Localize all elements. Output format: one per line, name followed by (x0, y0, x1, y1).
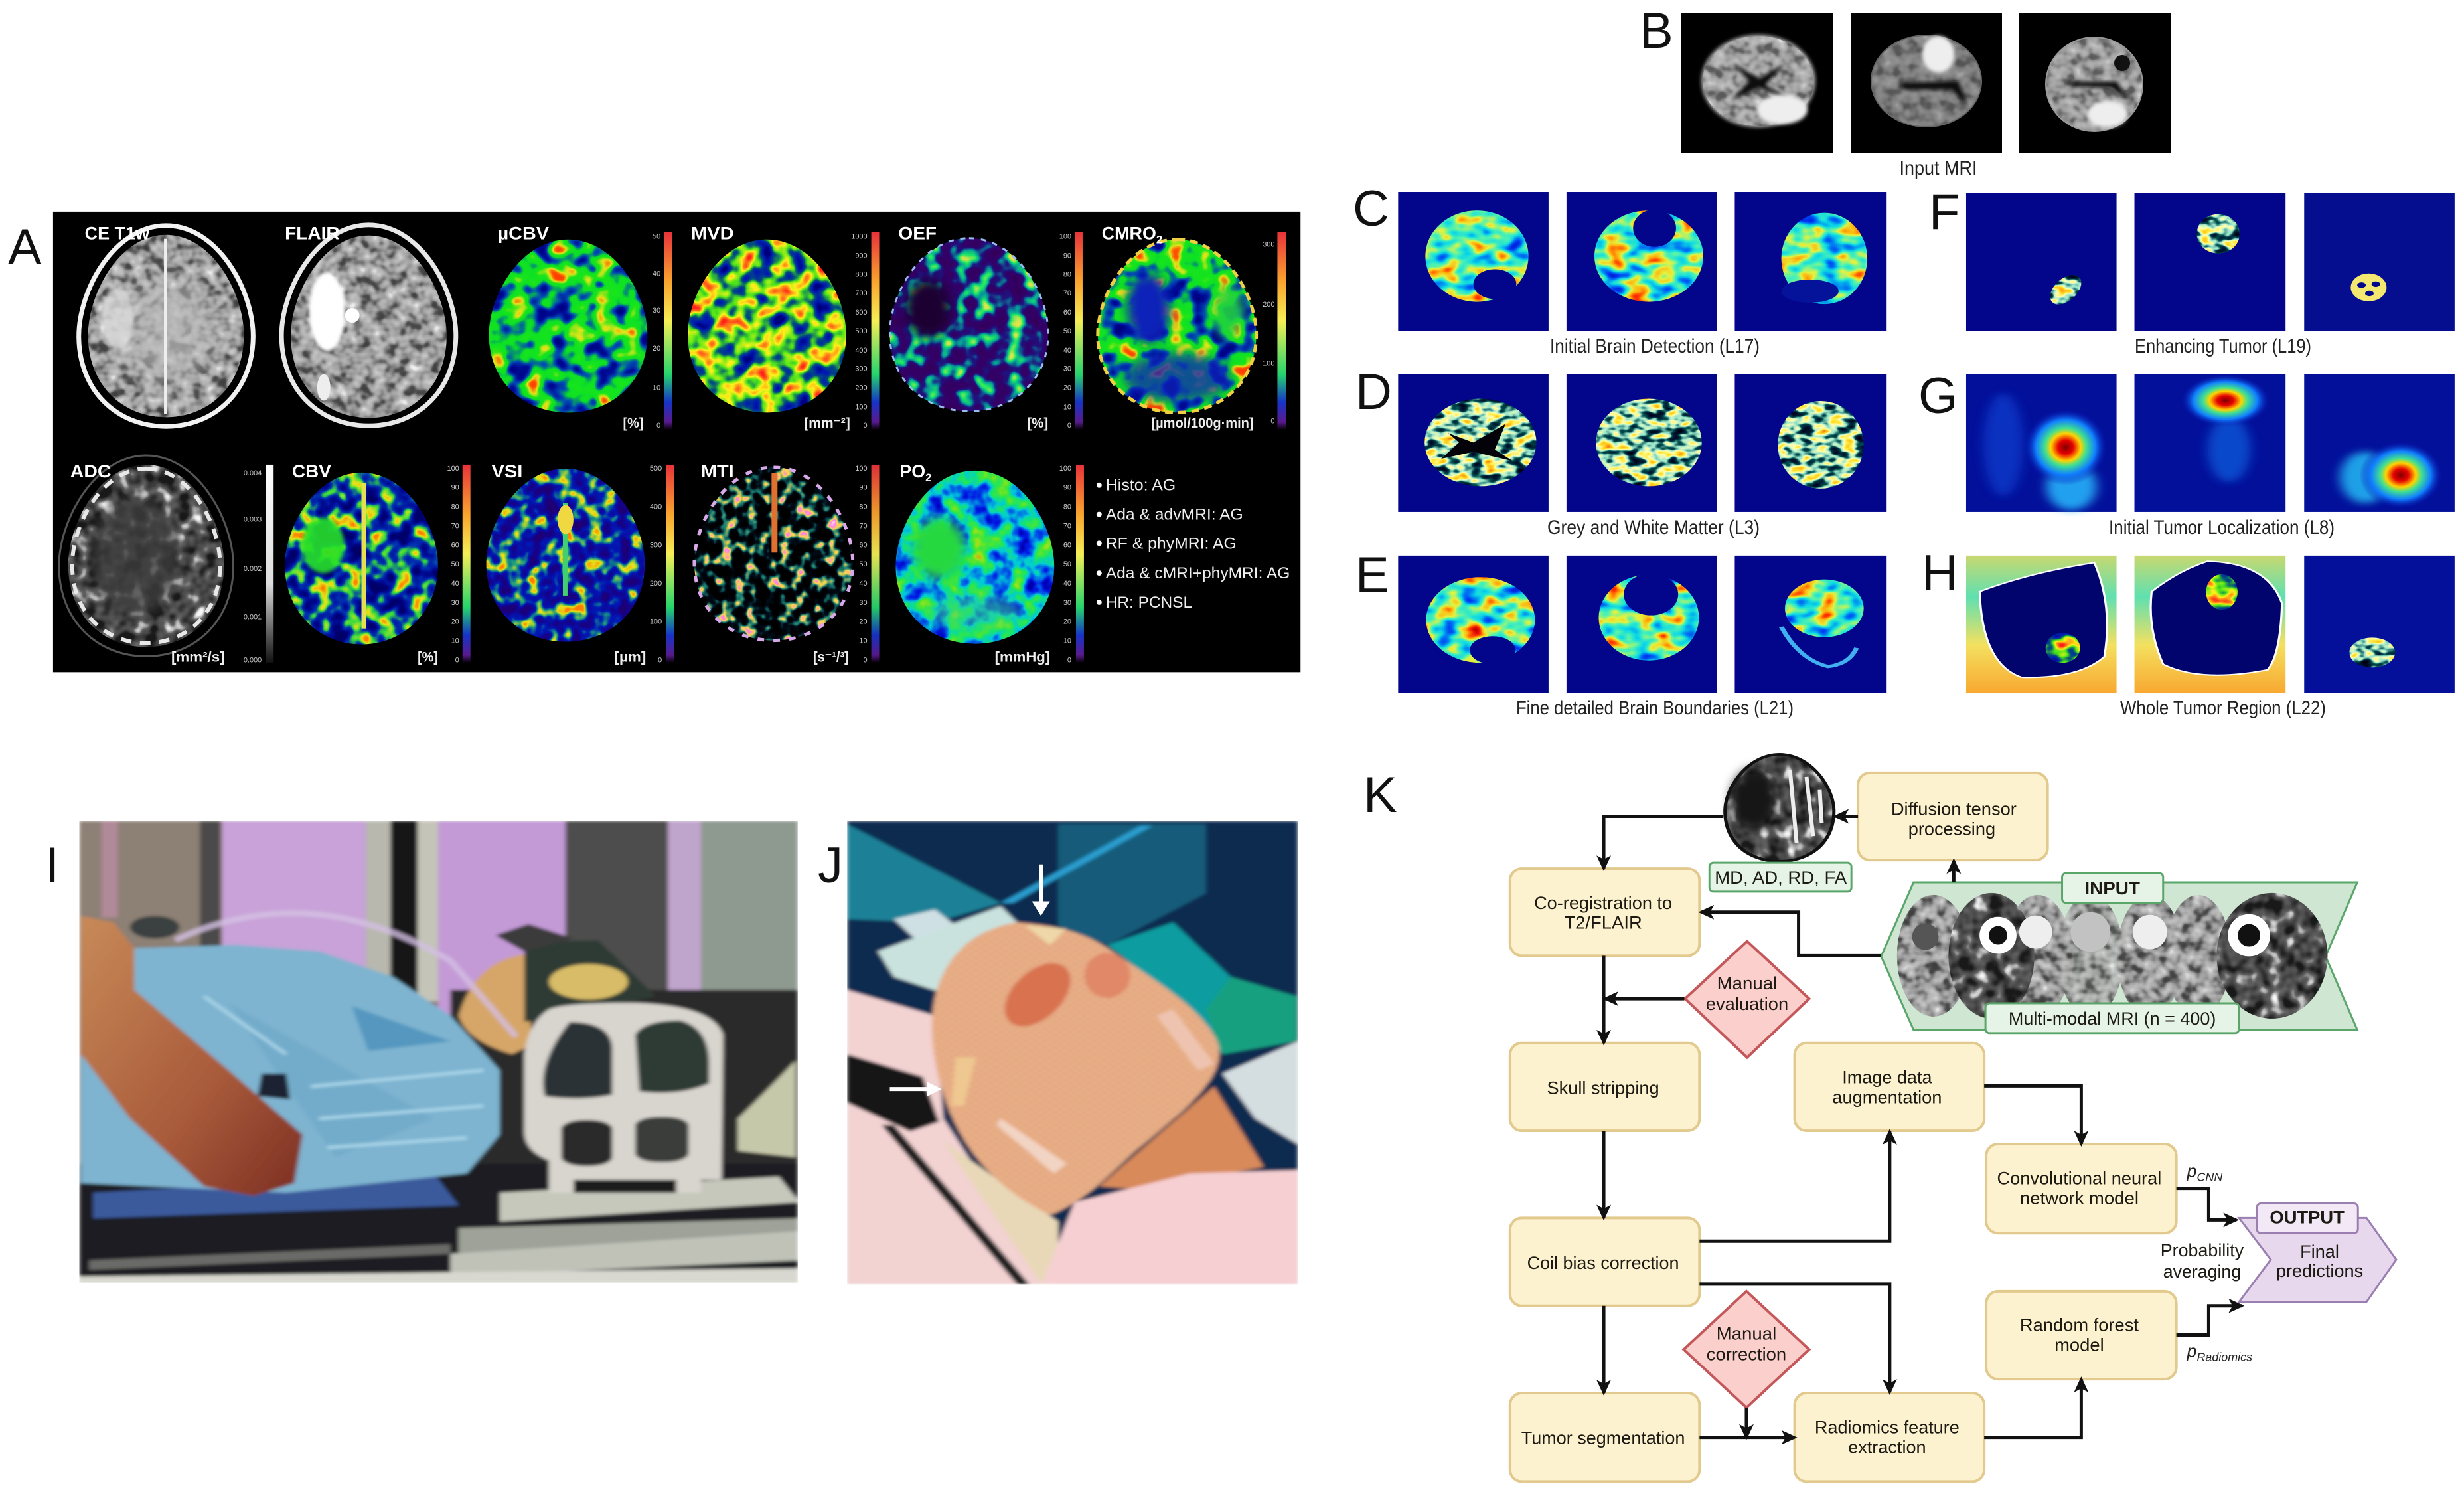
legend: RF & phyMRI: AG (1106, 535, 1237, 552)
arrow: skull stripping to coil bias (1602, 1131, 1606, 1218)
map units: [mm⁻²] (804, 416, 850, 431)
panel G: initial tumor localization (1966, 374, 2455, 512)
map titles: µCBV (497, 224, 549, 244)
tick labels row 2: 300 (650, 541, 662, 549)
tick labels row 2: 40 (451, 580, 459, 588)
panel H: whole tumor region (1966, 556, 2455, 693)
tick labels row 1: 100 (1059, 233, 1071, 241)
panel A: multiparametric MRI maps (53, 212, 1300, 672)
map titles: CMRO (1102, 224, 1156, 244)
heat map captions: Enhancing Tumor (L19) (2135, 335, 2311, 357)
label A: A (8, 219, 42, 276)
tick labels row 2: 0.004 (244, 469, 262, 477)
tick labels row 2: 70 (1063, 522, 1071, 530)
map: CBV (285, 473, 438, 645)
tick labels row 2: 90 (451, 484, 459, 492)
output chevron (2239, 1218, 2396, 1302)
diamond: manual correction: correction (1707, 1344, 1786, 1364)
output chevron: Final (2300, 1242, 2339, 1262)
tick labels row 1: 50 (1063, 327, 1071, 335)
output chevron: predictions (2276, 1261, 2363, 1281)
map titles: VSI (492, 461, 522, 481)
legend: Ada & advMRI: AG (1106, 506, 1243, 524)
OUTPUT tag: OUTPUT (2270, 1207, 2345, 1227)
arrow top (1039, 865, 1043, 906)
box: tumor segmentation: Tumor segmentation (1521, 1428, 1685, 1448)
arrow: coil bias to tumor segmentation (1602, 1306, 1606, 1393)
arrow: radiomics to random forest (1984, 1379, 2081, 1438)
arrow: input to diffusion (1952, 861, 1956, 882)
label: p CNN: p (2187, 1161, 2197, 1181)
tick labels row 2: 20 (1063, 618, 1071, 626)
map: PO2 (895, 471, 1054, 644)
brain: FLAIR (281, 225, 456, 426)
legend (1097, 477, 1290, 612)
tick labels row 1: 900 (855, 252, 868, 260)
tick labels row 2: 0.003 (244, 516, 262, 524)
tick labels row 1: 10 (1063, 403, 1071, 411)
box: co-registration: Co-registration to (1534, 893, 1672, 913)
tick labels row 2: 80 (859, 503, 868, 511)
map titles: FLAIR (285, 224, 340, 244)
box: tumor segmentation (1510, 1393, 1699, 1481)
INPUT tag (2062, 873, 2163, 903)
arrow: segmentation to radiomics (1699, 1436, 1795, 1439)
box: image data augmentation: augmentation (1832, 1087, 1942, 1107)
panel labels B to H: B (1640, 3, 1673, 59)
arrow: coil bias to radiomics (1699, 1284, 1890, 1392)
tick labels row 1: 300 (855, 365, 868, 373)
tick labels row 2: 30 (859, 599, 868, 607)
box: co-registration (1510, 869, 1699, 955)
box: diffusion tensor processing: processing (1908, 819, 1995, 839)
tick labels row 1: 20 (1063, 384, 1071, 392)
map units: [%] (623, 416, 643, 431)
label: probability averaging: Probability (2161, 1240, 2244, 1260)
map units: [s⁻¹/³] (813, 649, 849, 665)
map units: [µm] (615, 649, 646, 665)
arrow head top (1032, 902, 1050, 916)
tick labels row 2: 100 (855, 465, 868, 473)
tick labels row 1: 100 (855, 403, 868, 411)
tick labels row 1: 60 (1063, 309, 1071, 317)
tick labels row 1: 30 (1063, 365, 1071, 373)
panel labels B to H: H (1922, 545, 1958, 602)
map titles: MVD (691, 224, 734, 244)
tick labels row 2: 60 (451, 541, 459, 549)
multi-modal tag (1985, 1003, 2239, 1033)
tick labels row 2: 0.002 (244, 565, 262, 573)
arrow: manual evaluation feedback (1605, 997, 1684, 1001)
label K: K (1363, 767, 1397, 823)
box: CNN model (1986, 1144, 2177, 1233)
box: random forest model (1986, 1291, 2177, 1379)
arrow left (890, 1087, 931, 1091)
tick labels row 2: 100 (447, 465, 459, 473)
box: image data augmentation: Image data (1842, 1067, 1932, 1087)
DTI metric tag (1709, 863, 1851, 892)
panel J: patient with mask photo (847, 821, 1298, 1284)
tick labels row 1: 1000 (851, 233, 868, 241)
tick labels row 2: 40 (859, 580, 868, 588)
heat map captions: Initial Tumor Localization (L8) (2109, 517, 2335, 538)
tick labels row 1: 200 (1263, 301, 1274, 309)
arrow: brain to co-registration (1604, 816, 1723, 869)
diamond: manual correction (1683, 1291, 1809, 1408)
panel K: flowchart (1510, 753, 2396, 1481)
tick labels row 1: 500 (855, 327, 868, 335)
tick labels row 2: 50 (451, 560, 459, 568)
tick labels row 1: 600 (855, 309, 868, 317)
map titles: PO (899, 461, 925, 481)
box: radiomics feature extraction (1795, 1393, 1984, 1481)
tick labels row 2: 10 (859, 637, 868, 645)
input band (1881, 882, 2357, 1030)
map titles: 2 (1156, 234, 1162, 246)
tick labels row 1: 100 (1263, 360, 1274, 368)
map: OEF (889, 238, 1048, 411)
panel labels B to H: D (1355, 364, 1392, 420)
panel labels B to H: C (1353, 181, 1389, 237)
label: probability averaging (2161, 1240, 2244, 1282)
caption: Input MRI: Input MRI (1900, 157, 1977, 179)
tick labels row 2: 0 (455, 656, 459, 664)
panel labels B to H: E (1355, 547, 1389, 604)
panel E: fine brain boundaries (1398, 556, 1887, 693)
tick labels row 2: 90 (1063, 484, 1071, 492)
arrow: coil bias to augmentation (1699, 1131, 1890, 1241)
tick labels row 1: 700 (855, 290, 868, 297)
legend: Ada & cMRI+phyMRI: AG (1106, 564, 1290, 582)
heat map captions: Initial Brain Detection (L17) (1550, 335, 1760, 357)
tick labels row 2: 80 (1063, 503, 1071, 511)
tick labels row 1: 0 (1067, 422, 1071, 430)
box: skull stripping: Skull stripping (1547, 1078, 1659, 1098)
label: p Radiomics: Radiomics (2197, 1350, 2252, 1363)
box: skull stripping (1510, 1043, 1699, 1131)
heat map captions (1516, 335, 2335, 719)
map: MVD (688, 240, 846, 412)
tick labels row 2: 30 (451, 599, 459, 607)
tick labels row 2: 400 (650, 503, 662, 511)
map units: [%] (418, 649, 438, 665)
tick labels row 2: 10 (451, 637, 459, 645)
diamond: manual evaluation (1685, 942, 1809, 1058)
panel labels B to H (1353, 3, 1960, 604)
multi-modal tag: Multi-modal MRI (n = 400) (2009, 1009, 2216, 1029)
tick labels row 1: 0 (656, 422, 660, 430)
colour bars row 1 (664, 232, 1286, 430)
box: coil bias correction (1510, 1218, 1699, 1306)
box: diffusion tensor processing (1858, 773, 2048, 860)
tick labels row 2: 60 (859, 541, 868, 549)
map titles: OEF (898, 224, 937, 244)
tick labels row 1: 80 (1063, 270, 1071, 278)
box: radiomics feature extraction: extraction (1848, 1438, 1926, 1457)
arrow: diffusion to brain (1835, 815, 1858, 818)
box: coil bias correction: Coil bias correction (1527, 1253, 1679, 1273)
arrow: co-registration to skull stripping (1602, 955, 1606, 1043)
map: VSI (487, 469, 645, 642)
label: probability averaging: averaging (2163, 1262, 2241, 1282)
arrow: CNN to output (2177, 1189, 2236, 1220)
box: random forest model: model (2054, 1335, 2104, 1355)
tick labels row 2: 100 (650, 618, 662, 626)
label I: I (45, 837, 59, 894)
tick labels row 1: 50 (653, 233, 660, 241)
tick labels row 1: 0 (1270, 417, 1274, 425)
box: diffusion tensor processing: Diffusion tensor (1891, 799, 2017, 819)
tick labels row 2: 0 (658, 656, 662, 664)
tick labels row 2: 0.000 (244, 656, 262, 664)
panel C: initial brain detection (1398, 192, 1887, 331)
panel B: input MRI (1681, 13, 2171, 179)
tick labels row 2: 60 (1063, 541, 1071, 549)
OUTPUT tag (2257, 1204, 2358, 1233)
map units (171, 416, 1254, 665)
colour bars row 2 (266, 465, 1084, 663)
INPUT tag: INPUT (2084, 878, 2141, 898)
heat map captions: Whole Tumor Region (L22) (2120, 697, 2326, 719)
heat map captions: Grey and White Matter (L3) (1547, 517, 1760, 538)
legend: HR: PCNSL (1106, 594, 1192, 612)
map: µCBV (489, 240, 647, 412)
tick labels row 2: 0 (864, 656, 868, 664)
tick labels row 2: 40 (1063, 580, 1071, 588)
tick labels row 1: 20 (653, 345, 660, 353)
tick labels row 2: 500 (650, 465, 662, 473)
label: p Radiomics: p (2187, 1341, 2197, 1361)
brain: CE T1w (79, 226, 253, 426)
diamond: manual evaluation: evaluation (1706, 994, 1788, 1014)
box: CNN model: network model (2020, 1188, 2139, 1208)
arrow: augmentation to CNN (1984, 1086, 2081, 1144)
box: image data augmentation (1795, 1043, 1984, 1131)
DTI brain (1723, 753, 1835, 863)
tick labels row 2: 0 (1067, 656, 1071, 664)
arrow: input to co-registration (1701, 912, 1881, 955)
tick labels row 2: 80 (451, 503, 459, 511)
label: p CNN: CNN (2197, 1171, 2222, 1184)
box: random forest model: Random forest (2020, 1315, 2139, 1335)
arrow: manual correction (1744, 1408, 1748, 1438)
map units: [mmHg] (995, 649, 1050, 665)
tick labels row 2: 10 (1063, 637, 1071, 645)
map titles: ADC (70, 461, 111, 481)
map: CMRO2 (1098, 240, 1257, 412)
tick labels row 1: 10 (653, 384, 660, 392)
map titles (70, 224, 1162, 484)
heat map captions: Fine detailed Brain Boundaries (L21) (1516, 697, 1794, 719)
tick labels row 1: 400 (855, 347, 868, 355)
tick labels row 2: 70 (859, 522, 868, 530)
panels C to H heat maps (1398, 192, 2455, 693)
map titles: CE T1w (85, 224, 149, 244)
label J: J (818, 837, 843, 894)
brain: ADC (59, 455, 234, 656)
tick labels row 1: 0 (864, 422, 868, 430)
panel labels B to H: F (1929, 184, 1960, 240)
panel D: grey and white matter (1398, 374, 1887, 512)
multi-modal brain images (1897, 893, 2327, 1019)
panel F: enhancing tumor (1966, 193, 2455, 331)
panel I: patient on table photo (79, 821, 799, 1283)
tick labels row 1: 90 (1063, 252, 1071, 260)
tick labels row 1: 70 (1063, 290, 1071, 297)
tick labels row 1: 800 (855, 270, 868, 278)
map units: [%] (1027, 416, 1048, 431)
map: MTI (694, 467, 853, 641)
box: CNN model: Convolutional neural (1997, 1169, 2161, 1189)
map units: [mm²/s] (171, 649, 225, 665)
tick labels row 1: 40 (1063, 347, 1071, 355)
panel labels B to H: G (1918, 368, 1958, 424)
legend: Histo: AG (1106, 477, 1176, 495)
tick labels row 2: 200 (650, 580, 662, 588)
tick labels row 1: 200 (855, 384, 868, 392)
tick labels row 2: 50 (859, 560, 868, 568)
tick labels row 2: 90 (859, 484, 868, 492)
tick labels row 1: 300 (1263, 241, 1274, 249)
tick labels row 1: 30 (653, 307, 660, 315)
tick labels row 2: 20 (859, 618, 868, 626)
tick labels row 2: 30 (1063, 599, 1071, 607)
tick labels row 2: 70 (451, 522, 459, 530)
box: radiomics feature extraction: Radiomics feature (1815, 1418, 1960, 1438)
tick labels row 2: 100 (1059, 465, 1071, 473)
tick labels row 2: 50 (1063, 560, 1071, 568)
diamond: manual correction: Manual (1717, 1323, 1776, 1343)
map titles: MTI (701, 461, 734, 481)
box: co-registration: T2/FLAIR (1564, 913, 1642, 933)
tick labels row 2: 0.001 (244, 614, 262, 621)
arrow: random forest to output (2177, 1306, 2242, 1335)
tick labels row 1: 40 (653, 270, 660, 278)
map titles: 2 (925, 471, 932, 484)
map titles: CBV (292, 461, 331, 481)
tick labels row 2: 20 (451, 618, 459, 626)
DTI metric tag: MD, AD, RD, FA (1715, 868, 1847, 888)
arrow head left (927, 1082, 941, 1096)
map units: [µmol/100g·min] (1151, 416, 1254, 431)
diamond: manual evaluation: Manual (1717, 973, 1777, 993)
